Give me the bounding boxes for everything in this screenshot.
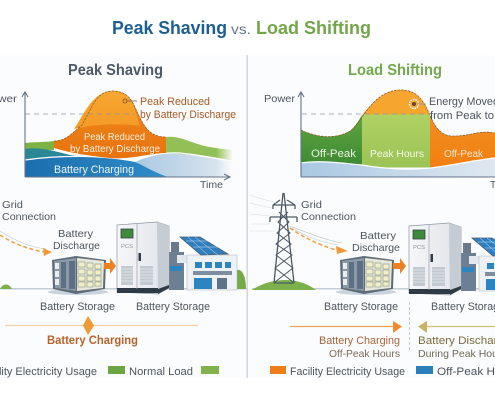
charging label <box>319 335 400 360</box>
icon: battery storage <box>336 256 396 295</box>
arrow: grid to battery <box>290 228 348 254</box>
chart labels: Off-Peak <box>444 149 484 160</box>
panel: peak shaving <box>0 62 247 378</box>
storage labels <box>40 301 210 313</box>
battery discharge label: Discharge <box>53 240 100 252</box>
icon: battery storage <box>48 256 108 295</box>
grid connection label <box>301 199 356 223</box>
legend: peak shaving: Normal Load <box>129 366 193 378</box>
grid connection label: Grid <box>2 199 23 211</box>
callout: peak reduced: Peak Reduced <box>140 96 210 108</box>
chart labels <box>54 132 160 176</box>
chart labels: by Battery Discharge <box>70 143 160 155</box>
battery charging indicator: Battery Charging <box>47 335 138 347</box>
divider: dashed vertical <box>408 302 410 352</box>
arrow: discharge peak <box>418 321 495 333</box>
icon: pcs cabinet <box>117 222 169 294</box>
ground <box>0 270 247 290</box>
legend: peak shaving <box>0 366 219 378</box>
heading: peak shaving: Peak Shaving <box>68 62 163 79</box>
icon: facility with solar <box>169 237 237 290</box>
charging label: Off-Peak Hours <box>329 348 400 360</box>
grid connection label: Grid <box>301 199 322 211</box>
callout: peak reduced <box>123 96 236 121</box>
battery discharge label: Battery <box>58 228 94 240</box>
chart labels: Peak Reduced <box>84 132 145 143</box>
grid connection label: Connection <box>301 211 356 223</box>
battery discharge label: Battery <box>360 230 397 242</box>
discharge label <box>418 335 495 360</box>
chart labels: Battery Charging <box>54 164 134 176</box>
callout: energy moved <box>410 96 495 122</box>
battery discharge label <box>352 230 400 254</box>
main title <box>112 17 371 38</box>
chart labels: Off-Peak <box>311 148 357 160</box>
arrow: charging off-peak <box>290 321 402 333</box>
charging label: Battery Charging <box>319 335 400 347</box>
chart: peak shaving area chart <box>0 91 236 191</box>
legend: load shifting: Off-Peak H <box>437 366 495 378</box>
main title: Load Shifting <box>256 17 371 38</box>
heading: load shifting: Load Shifting <box>348 62 442 79</box>
arrow: battery to pcs <box>393 258 406 274</box>
storage labels: Battery Storage <box>40 301 115 313</box>
chart labels <box>311 148 484 160</box>
icon: facility with solar <box>461 238 495 291</box>
axes <box>22 92 230 180</box>
main title: Peak Shaving <box>112 17 227 38</box>
battery charging indicator <box>5 316 198 347</box>
storage labels: Battery Storage <box>324 301 398 313</box>
main title: vs. <box>231 21 251 37</box>
axis labels <box>0 94 223 191</box>
arrow: grid to battery <box>0 231 52 256</box>
legend: load shifting: Facility Electricity Usage <box>290 366 405 378</box>
axis labels: Time <box>200 180 223 191</box>
legend: peak shaving: lity Electricity Usage <box>0 366 97 378</box>
system diagram: tower to facility <box>249 193 495 378</box>
callout: peak reduced: by Battery Discharge <box>140 109 236 121</box>
battery discharge label: Discharge <box>352 242 400 254</box>
chart labels: Peak Hours <box>370 148 424 160</box>
icon: ground and grass <box>252 280 495 290</box>
grid connection label <box>2 199 56 223</box>
panel: load shifting <box>249 62 495 378</box>
callout: energy moved: from Peak to <box>430 110 494 122</box>
storage labels <box>324 301 495 313</box>
axis labels <box>264 93 495 191</box>
system diagram: grid to facility <box>0 199 247 378</box>
icon: transmission tower <box>249 193 342 283</box>
storage labels: Battery Storage <box>136 301 210 313</box>
axes <box>298 92 495 177</box>
chart: load shifting area chart <box>264 90 495 191</box>
legend: load shifting <box>270 366 495 378</box>
battery discharge label <box>53 228 100 252</box>
grid connection label: Connection <box>2 211 56 223</box>
arrow: battery to pcs <box>104 258 116 274</box>
axis labels: Power <box>264 93 296 105</box>
icon: pcs cabinet <box>409 223 461 295</box>
